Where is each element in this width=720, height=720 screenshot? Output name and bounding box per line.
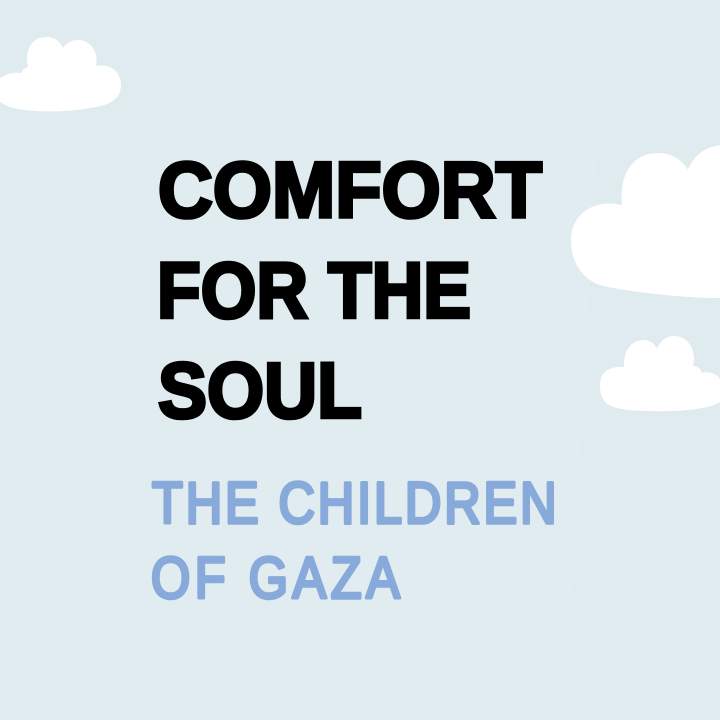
icon: cloud top left xyxy=(0,37,121,111)
icon: cloud right small xyxy=(600,336,720,411)
title: FOR THE xyxy=(157,246,471,334)
subtitle xyxy=(151,471,557,611)
title xyxy=(157,145,542,434)
subtitle: OF GAZA xyxy=(151,546,401,611)
icon: cloud right large xyxy=(571,145,720,298)
subtitle: THE CHILDREN xyxy=(152,471,557,536)
title: SOUL xyxy=(158,346,362,434)
title: COMFORT xyxy=(158,145,542,234)
